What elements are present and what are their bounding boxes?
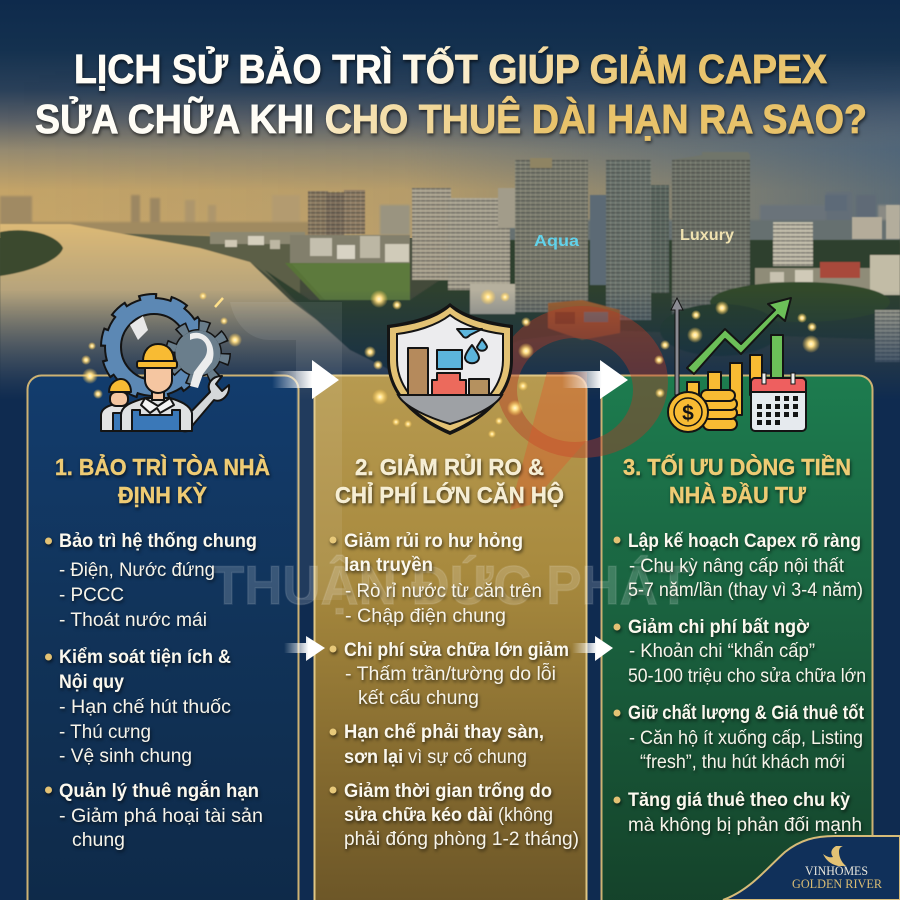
heading: panel 3: 3. TỐI ƯU DÒNG TIỀN: [623, 453, 851, 480]
item: capex plan: Lập kế hoạch Capex rõ ràng: [628, 531, 861, 552]
heading: panel 2: 2. GIẢM RỦI RO &: [355, 452, 544, 480]
item: spreading damage: Giảm rủi ro hư hỏng: [344, 531, 523, 552]
item: short-term rental management: - Giảm phá hoại tài sản: [59, 806, 263, 827]
item: common systems: - Thoát nước mái: [59, 610, 207, 631]
item: rent increase: [614, 790, 862, 836]
item: lower major repair cost: [330, 640, 569, 709]
item: fewer surprise costs: [614, 617, 866, 687]
item: amenities and rules: [45, 647, 231, 767]
panel 2 content: [330, 452, 579, 850]
icon part: axis arrow: [671, 298, 683, 395]
icon part: wrench: [179, 376, 229, 431]
item: quality and rent: [614, 703, 865, 773]
icon part: large gear: [108, 301, 200, 393]
icon part: main worker: [121, 344, 192, 431]
background photo: river and city skyline: [0, 56, 900, 390]
icon part: small gear: [130, 316, 225, 388]
item: quality and rent: Giữ chất lượng & Giá thuê tốt: [628, 703, 865, 724]
icon: shield with damaged room: [387, 303, 513, 435]
title: [35, 46, 867, 142]
item: spreading damage: lan truyền: [344, 555, 433, 576]
item: less floor replacement: [330, 722, 544, 768]
item: amenities and rules: - Hạn chế hút thuốc: [59, 697, 231, 718]
item: fewer surprise costs: Giảm chi phí bất ngờ: [628, 617, 809, 638]
item: shorter vacancy: sửa chữa kéo dài (không: [344, 805, 553, 826]
item: capex plan: [614, 531, 863, 601]
panel: cash flow background: [602, 376, 872, 900]
item: spreading damage: [330, 531, 542, 627]
item: capex plan: - Chu kỳ nâng cấp nội thất: [629, 556, 845, 577]
item: lower major repair cost: Chi phí sửa chữa lớn giảm: [344, 640, 569, 661]
item: lower major repair cost: - Thấm trần/tường do lỗi: [345, 663, 556, 685]
logo corner: Vinhomes Golden River: [723, 836, 900, 900]
icon part: calendar: [751, 373, 806, 431]
item: less floor replacement: Hạn chế phải thay sàn,: [344, 722, 544, 743]
item: spreading damage: - Rò rỉ nước từ căn trên: [345, 581, 542, 602]
arrow: panel 2 to panel 3 top: [562, 360, 628, 399]
icon part: small worker: [101, 379, 131, 431]
item: shorter vacancy: [330, 781, 579, 850]
item: fewer surprise costs: - Khoản chi “khẩn cấp”: [629, 641, 815, 662]
heading: panel 3: NHÀ ĐẦU TƯ: [669, 481, 806, 508]
logo text: GOLDEN RIVER: [792, 877, 883, 891]
heading: panel 3: [623, 453, 851, 508]
arrow: panel 2 to panel 3 middle: [572, 636, 613, 661]
panel 1 content: [45, 452, 270, 851]
logo text: VINHOMES: [805, 864, 868, 878]
arrow: panel 1 to panel 2 middle: [284, 636, 325, 661]
icon part: growth arrow: [687, 298, 791, 374]
item: quality and rent: - Căn hộ ít xuống cấp, Listing: [629, 728, 863, 749]
icon: growth chart, coins and calendar: [668, 298, 806, 432]
item: short-term rental management: chung: [72, 830, 125, 851]
heading: panel 1: [55, 452, 270, 508]
icon part: dollar coin: $: [682, 402, 694, 425]
item: lower major repair cost: kết cấu chung: [358, 688, 479, 709]
item: shorter vacancy: Giảm thời gian trống do: [344, 781, 552, 802]
item: common systems: [45, 531, 257, 631]
icon: swan logo: [823, 846, 846, 866]
item: less floor replacement: sơn lại vì sự cố chung: [344, 747, 527, 768]
item: rent increase: mà không bị phản đối mạnh: [628, 815, 862, 836]
logo text: [792, 864, 883, 891]
icon part: bars: [687, 335, 783, 415]
title: LỊCH SỬ BẢO TRÌ TỐT GIÚP GIẢM CAPEX: [74, 46, 827, 92]
item: shorter vacancy: phải đóng phòng 1-2 tháng): [344, 829, 579, 850]
watermark logo: [212, 302, 690, 616]
panel: risk background: [314, 376, 586, 900]
item: quality and rent: “fresh”, thu hút khách mới: [640, 752, 845, 773]
item: common systems: Bảo trì hệ thống chung: [59, 531, 257, 552]
item: fewer surprise costs: 50-100 triệu cho sửa chữa lớn: [628, 666, 866, 687]
panel: maintenance background: [28, 376, 298, 900]
item: common systems: - Điện, Nước đứng: [59, 560, 215, 581]
item: amenities and rules: Kiểm soát tiện ích &: [59, 647, 231, 668]
item: amenities and rules: - Thú cưng: [59, 722, 151, 743]
heading: panel 2: CHỈ PHÍ LỚN CĂN HỘ: [335, 480, 564, 508]
item: amenities and rules: - Vệ sinh chung: [59, 746, 192, 767]
item: amenities and rules: Nội quy: [59, 672, 124, 693]
item: capex plan: 5-7 năm/lần (thay vì 3-4 năm): [628, 580, 863, 601]
panel 3 content: [614, 453, 866, 836]
icon part: coin stack: [701, 390, 737, 430]
arrow: panel 1 to panel 2 top: [272, 360, 339, 399]
heading: panel 1: 1. BẢO TRÌ TÒA NHÀ: [55, 452, 270, 480]
heading: panel 2: [335, 452, 564, 508]
item: short-term rental management: [45, 780, 263, 851]
item: spreading damage: - Chập điện chung: [345, 606, 506, 627]
icon: maintenance workers and gears: [101, 301, 229, 431]
watermark logo: THUẬN ĐỨC PHÁT: [212, 554, 690, 616]
item: common systems: - PCCC: [59, 585, 124, 606]
sparkles: [81, 289, 820, 438]
tower label: Aqua: Aqua: [534, 233, 579, 250]
tower label: Luxury: Luxury: [680, 227, 734, 244]
item: rent increase: Tăng giá thuê theo chu kỳ: [628, 790, 850, 811]
heading: panel 1: ĐỊNH KỲ: [118, 481, 207, 508]
item: short-term rental management: Quản lý thuê ngắn hạn: [59, 780, 259, 802]
